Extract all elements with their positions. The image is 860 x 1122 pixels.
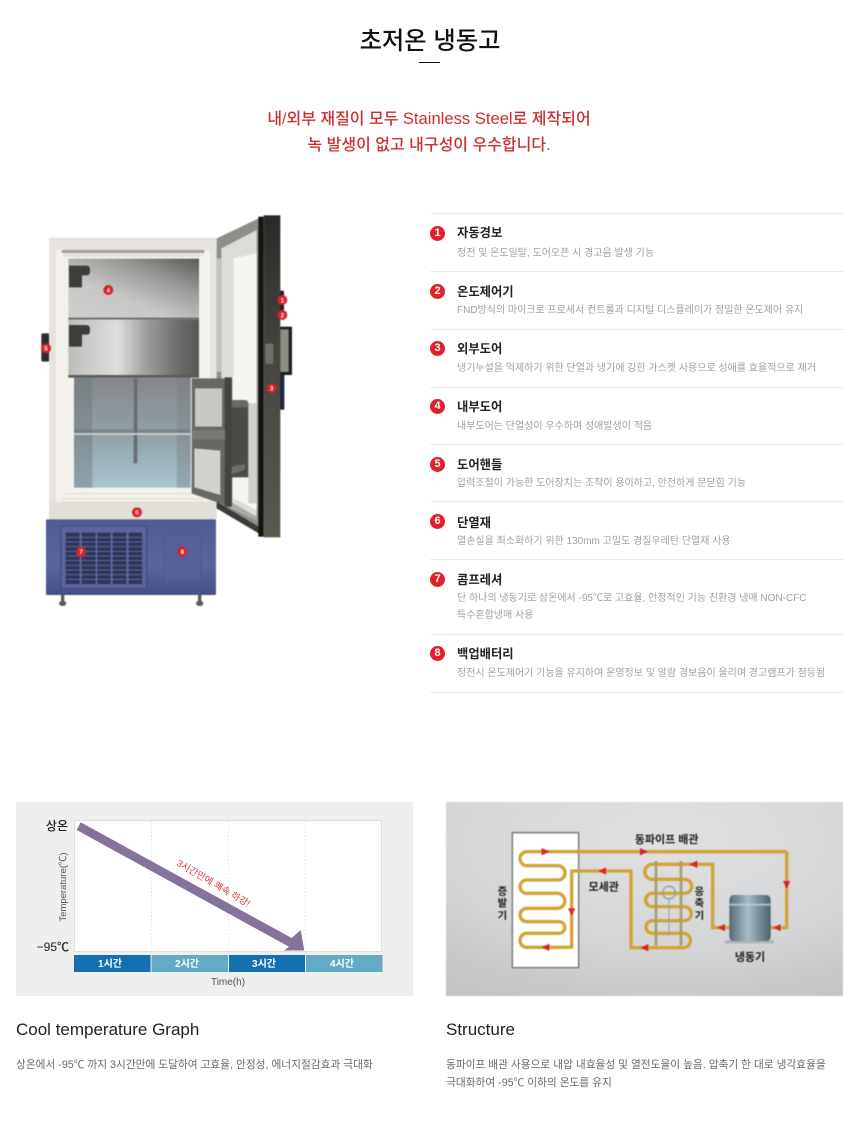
time bar: 4시간 [330,958,354,970]
feature 7 title: 콤프레셔 [457,573,502,587]
structure heading: Structure [446,1020,515,1039]
feature 1 title: 자동경보 [457,226,502,240]
badge 3 [430,341,445,356]
time bar [74,955,382,972]
graph description: 상온에서 -95℃ 까지 3시간만에 도달하여 고효율, 안정성, 에너지절감효과 극대화 [16,1059,373,1071]
y axis labels [37,819,69,954]
flow arrows [542,848,790,951]
evaporator box [512,833,579,968]
feature 4 description: 내부도어는 단열성이 우수하며 성애발생이 적음 [457,421,652,432]
red subtitle: 녹 발생이 없고 내구성이 우수합니다. [307,137,551,154]
x axis label: Time(h) [211,977,245,988]
outer door [217,218,259,533]
y axis labels: −95℃ [37,940,69,954]
number markers: 3 [270,386,274,393]
red subtitle [267,109,591,154]
structure description [446,1058,826,1088]
evaporator label: 증 [498,886,508,898]
feature 5 title: 도어핸들 [457,458,502,472]
structure description: 극대화하여 -95℃ 이하의 온도를 유지 [446,1076,612,1088]
left door handle [41,333,49,362]
condenser label: 기 [695,909,704,922]
chart: cool temperature graph [16,802,413,996]
condenser label: 응 [695,886,705,898]
feature 2 description: FND방식의 마이크로 프로세서 컨트롤과 디지털 디스플레이가 정밀한 온도제어 유지 [457,305,803,316]
open inner doors [192,377,248,507]
number markers: 4 [107,287,111,294]
inner door panel upper [68,259,199,320]
feature 1 description: 정전 및 온도일탈, 도어오픈 시 경고음 발생 기능 [457,248,654,259]
capillary label: 모세관 [588,881,619,894]
feature 7 description: 단 하나의 냉동기로 상온에서 -95℃로 고효율, 안정적인 기능 친환경 냉매 NON-CFC [457,593,807,604]
inner door panel lower [68,320,199,378]
number markers: 1 [281,297,285,304]
feature 2 title: 온도제어기 [457,285,514,299]
condenser frame [656,861,681,946]
badge 2: 2 [434,285,441,297]
feature 6 description: 열손실을 최소화하기 위한 130mm 고밀도 경질우레탄 단열재 사용 [457,536,731,547]
condenser label: 축 [695,898,705,910]
badge 6 [430,514,445,529]
compressor [725,895,774,943]
compressor base cabinet [46,519,216,595]
badge 8 [430,646,445,661]
badge 4 [430,399,445,414]
red subtitle: 내/외부 재질이 모두 Stainless Steel로 제작되어 [267,109,591,128]
badge 7: 7 [434,573,441,585]
number markers: 7 [79,549,83,556]
badge 8: 8 [434,647,441,659]
badge 5: 5 [434,458,441,470]
inner chamber with shelf [74,378,191,488]
inner door latch upper [69,266,90,287]
feature 3 title: 외부도어 [457,342,502,356]
graph heading: Cool temperature Graph [16,1020,199,1039]
y axis labels: Temperature(℃) [58,852,69,922]
door lock [265,343,273,364]
feature 8 title: 백업배터리 [457,647,514,661]
badge 2 [430,284,445,299]
structure description: 동파이프 배관 사용으로 내압 내효율성 및 열전도율이 높음. 압축기 한 대로 냉각효율을 [446,1059,826,1071]
door edge [258,215,280,537]
back door handle and controller [279,291,292,410]
badge 1 [430,226,445,241]
time bar: 3시간 [252,958,276,970]
feature list [430,213,843,693]
title: 초저온 냉동고 [360,28,500,55]
illustration: open freezer with numbered markers [40,214,293,607]
pipe label: 동파이프 배관 [635,832,699,846]
compressor label: 냉동기 [735,950,765,964]
outlet pipe to compressor [769,852,787,928]
inner door latch lower [69,325,90,347]
badge 3: 3 [434,342,441,354]
feature 7 description [457,592,807,620]
feature 3 description: 냉기누설을 억제하기 위한 단열과 냉기에 강한 가스켓 사용으로 성애를 효율적으로 제거 [457,363,816,374]
feature 8 description: 정전시 온도제어기 기능을 유지하여 운영정보 및 알람 경보음이 울리며 경고램프가 점등됨 [457,668,825,679]
freezer cabinet [49,238,217,519]
number markers: 8 [181,549,185,556]
feature 7 description: 특수혼합냉매 사용 [457,610,533,620]
time bar: 1시간 [98,958,122,970]
evaporator label: 기 [498,909,507,922]
number markers [41,285,287,557]
feet [59,595,203,606]
feature 5 description: 압력조절이 가능한 도어장치는 조작이 용이하고, 안전하게 문닫힘 기능 [457,478,746,489]
evaporator label: 발 [498,898,508,910]
time bar: 2시간 [175,958,199,970]
badge 6: 6 [434,515,441,527]
number markers: 5 [44,346,48,353]
plot area [74,820,382,952]
arrow caption: 3시간만에 쾌속 하강! [174,857,252,910]
diagram: refrigeration structure [446,802,844,996]
feature 6 title: 단열재 [457,516,491,530]
number markers: 6 [135,510,139,517]
badge 1: 1 [434,227,441,239]
badge 5 [430,457,445,472]
title underline [419,62,440,63]
number markers: 2 [281,312,285,319]
descending arrow [77,822,304,950]
evaporator, capillary and condenser coil [520,852,787,948]
badge 4: 4 [434,400,441,412]
y axis labels: 상온 [46,819,68,833]
badge 7 [430,572,445,587]
feature 4 title: 내부도어 [457,400,502,414]
